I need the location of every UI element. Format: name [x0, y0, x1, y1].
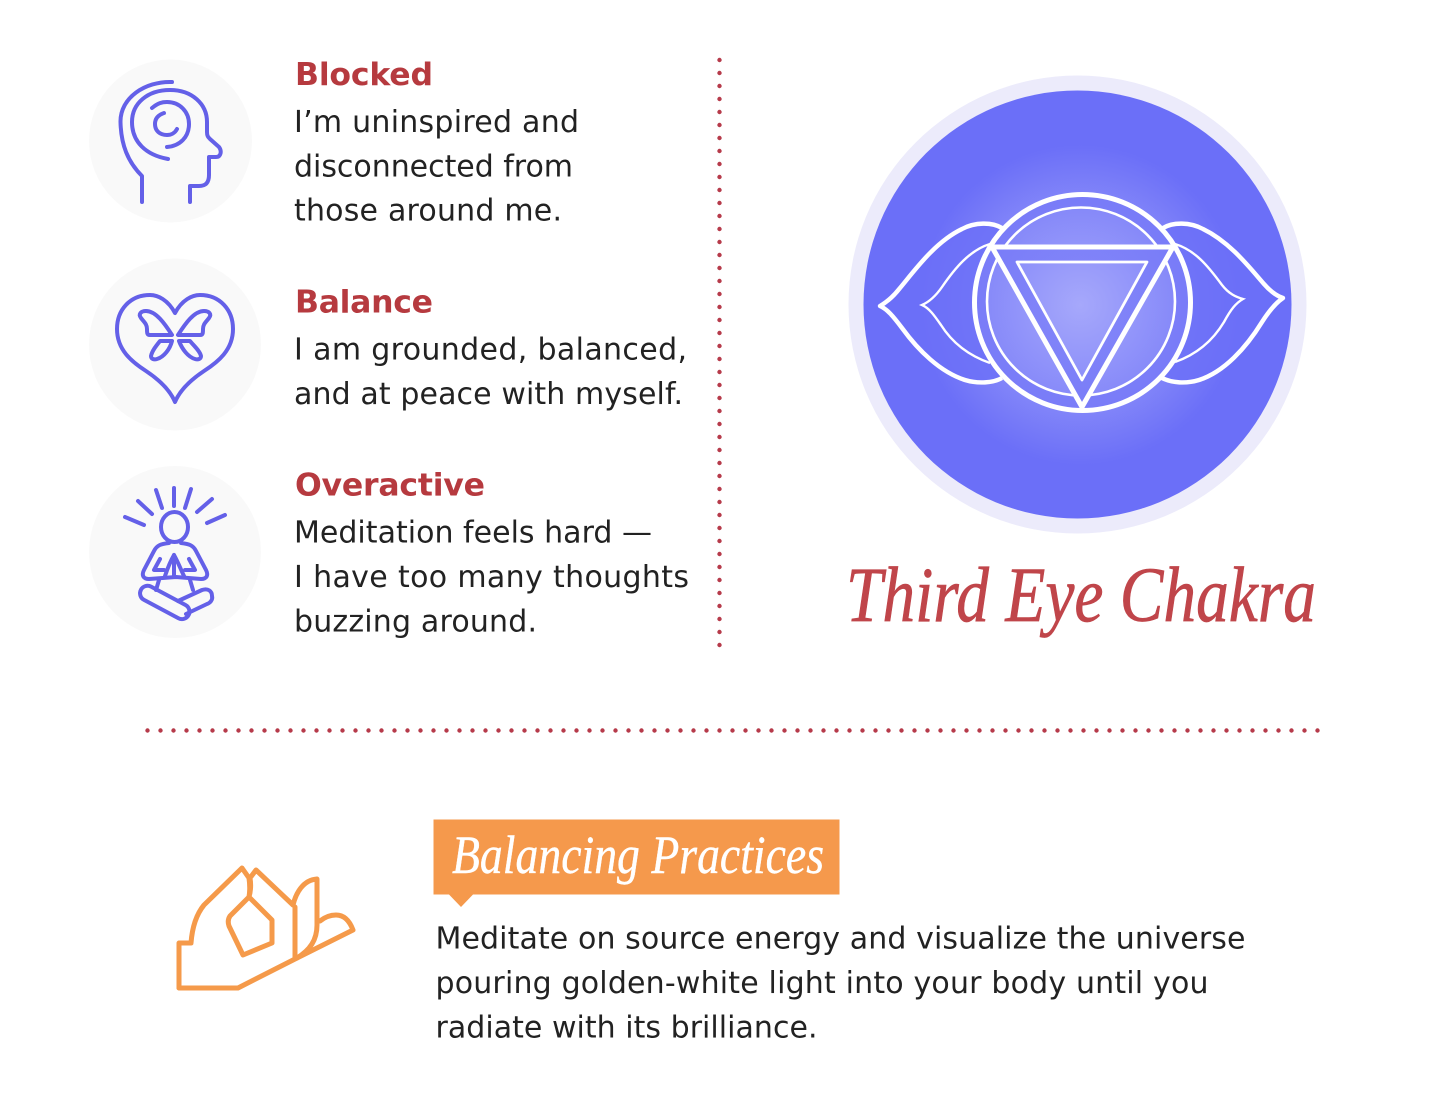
heading: Blocked: Blocked — [295, 57, 433, 93]
title: Third Eye Chakra: Third Eye Chakra — [846, 551, 1316, 638]
text: overactive description: Meditation feels hard — — [294, 516, 652, 551]
text: blocked description: disconnected from — [294, 149, 573, 184]
icon: head with spiral — [89, 60, 252, 222]
text: balancing practices description: pouring golden-white light into your body until you — [436, 966, 1208, 1001]
heading: Overactive: Overactive — [295, 468, 485, 504]
icon: heart with butterfly — [89, 258, 261, 430]
icon: third eye chakra symbol — [848, 76, 1306, 534]
text: balance description: I am grounded, balanced, — [294, 333, 687, 368]
text: balancing practices description: radiate with its brilliance. — [436, 1010, 818, 1045]
text: blocked description: those around me. — [294, 194, 562, 229]
banner: Balancing Practices: Balancing Practices — [452, 825, 824, 885]
text: overactive description: I have too many thoughts — [294, 560, 689, 595]
banner: Balancing Practices — [434, 820, 840, 907]
panel: overactive state — [89, 466, 689, 640]
text: balancing practices description: Meditate on source energy and visualize the universe — [436, 922, 1246, 957]
text: blocked description — [294, 105, 579, 229]
text: balance description: and at peace with myself. — [294, 377, 683, 412]
panel: balance state — [89, 258, 687, 430]
panel: blocked state — [89, 57, 579, 229]
icon: meditating figure — [89, 466, 261, 638]
text: overactive description — [294, 516, 689, 640]
text: balance description — [294, 333, 687, 412]
text: overactive description: buzzing around. — [294, 604, 537, 640]
icon: hand mudra — [179, 868, 353, 988]
heading: Balance: Balance — [295, 285, 433, 321]
text: balancing practices description — [436, 922, 1246, 1045]
text: blocked description: I’m uninspired and — [294, 105, 579, 140]
